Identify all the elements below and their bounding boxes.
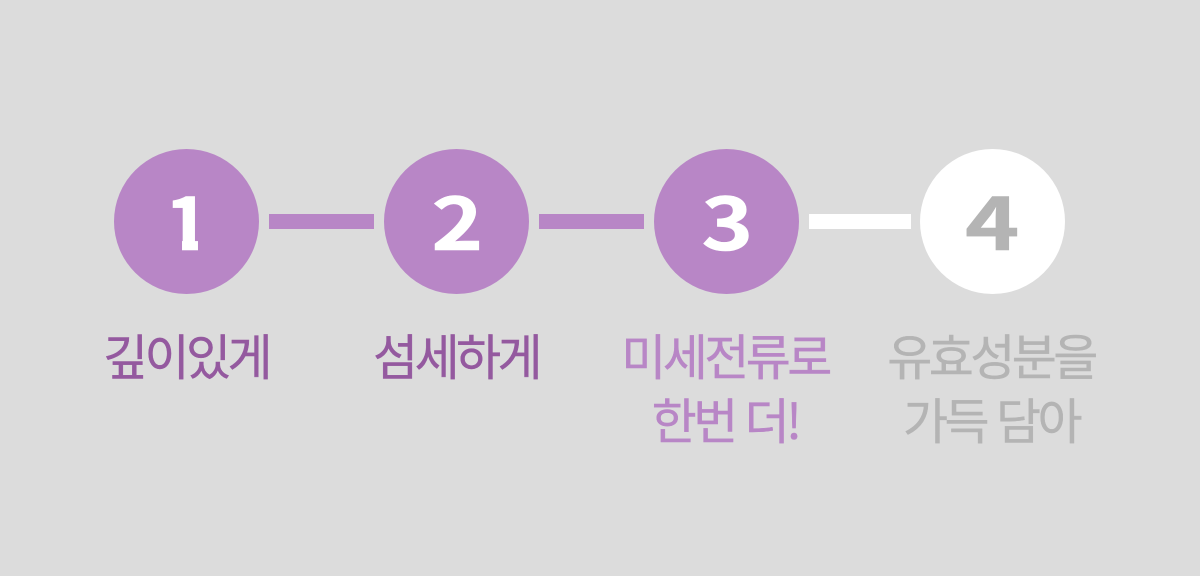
step 1 circle: 1 xyxy=(164,166,211,271)
label step 3: 한번 더! xyxy=(652,383,798,454)
label step 3 xyxy=(621,319,830,454)
label step 1: 깊이있게 xyxy=(103,319,269,390)
label step 4 xyxy=(887,319,1096,454)
label step 2: 섬세하게 xyxy=(373,319,539,390)
connector 3-4 xyxy=(809,214,911,229)
step 3 circle: 3 xyxy=(702,166,753,271)
connector 1-2 xyxy=(269,214,374,229)
step 1 circle xyxy=(114,149,259,294)
label step 4: 유효성분을 xyxy=(887,319,1095,390)
label step 4: 가득 담아 xyxy=(903,383,1079,454)
step 2 circle xyxy=(384,149,529,294)
step 4 circle xyxy=(920,149,1065,294)
step 4 circle: 4 xyxy=(965,166,1020,271)
label step 3: 미세전류로 xyxy=(621,319,829,390)
step 2 circle: 2 xyxy=(432,166,483,271)
connector 2-3 xyxy=(539,214,644,229)
step 3 circle xyxy=(654,149,799,294)
